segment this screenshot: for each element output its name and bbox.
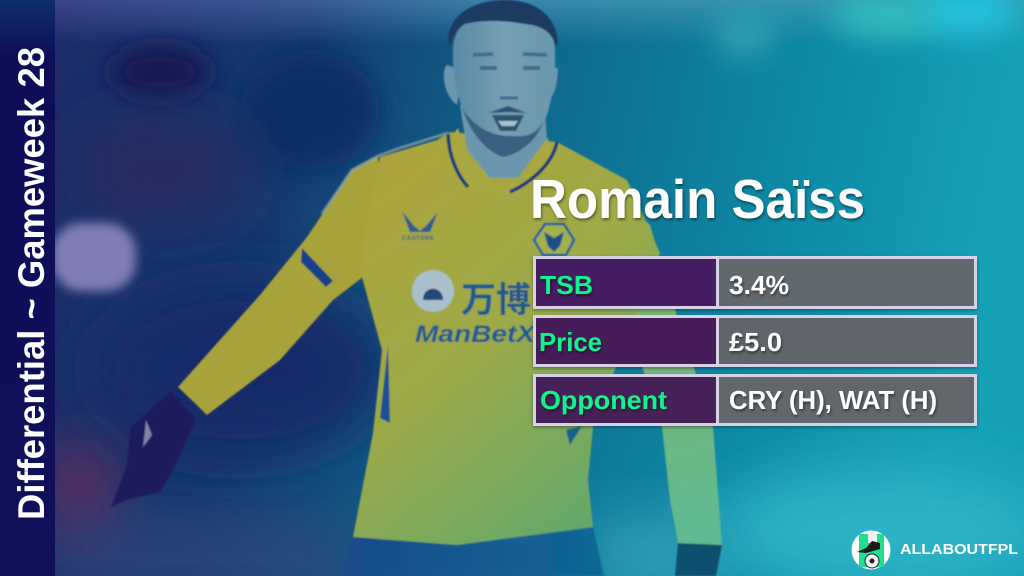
row: TSB: TSB xyxy=(540,270,593,300)
player name: Romain Saïss xyxy=(530,168,865,230)
row: Opponent: Opponent xyxy=(540,385,667,415)
underarm gap right xyxy=(566,426,582,445)
beard xyxy=(462,108,543,157)
shoulder highlight xyxy=(322,133,448,214)
right arm xyxy=(620,200,722,545)
right glove xyxy=(675,543,722,576)
logo: AllAboutFPL xyxy=(852,530,1018,570)
neck xyxy=(460,105,547,178)
vertical heading: Differential ~ Gameweek 28 xyxy=(11,47,52,520)
shorts xyxy=(343,527,604,576)
glove logo xyxy=(143,420,152,447)
club badge xyxy=(534,224,574,255)
sponsor: characters: 万博 xyxy=(461,281,531,320)
kit brand logo xyxy=(402,211,438,232)
row: Price: £5.0 xyxy=(729,327,782,357)
underarm gap left xyxy=(380,345,390,423)
player photo xyxy=(111,0,722,576)
sponsor: wordmark: ManBetX xyxy=(415,321,537,348)
eyes xyxy=(480,66,540,70)
left sleeve xyxy=(178,156,385,415)
nose shadow xyxy=(500,96,518,100)
stats table xyxy=(533,256,977,426)
row: Opponent: CRY (H), WAT (H) xyxy=(729,385,937,415)
collar piping xyxy=(448,134,557,192)
torso xyxy=(353,132,660,545)
kit brand text: CASTORE xyxy=(402,236,434,242)
row: TSB: 3.4% xyxy=(729,270,789,300)
cuff band on sleeve xyxy=(301,248,333,287)
hair xyxy=(448,0,558,48)
eyebrows xyxy=(473,54,547,55)
logo: AllAboutFPL: ALLABOUTFPL xyxy=(900,541,1018,558)
ears xyxy=(444,65,558,105)
row: Price: Price xyxy=(539,327,602,357)
row: TSB xyxy=(533,256,977,309)
mustache xyxy=(488,106,527,113)
collar xyxy=(448,128,560,196)
left band xyxy=(0,0,55,576)
head xyxy=(453,5,555,157)
left glove xyxy=(111,391,196,507)
sponsor: crest xyxy=(412,270,454,312)
row: Opponent xyxy=(533,374,977,426)
row: Price xyxy=(533,315,977,367)
mouth xyxy=(492,115,524,131)
